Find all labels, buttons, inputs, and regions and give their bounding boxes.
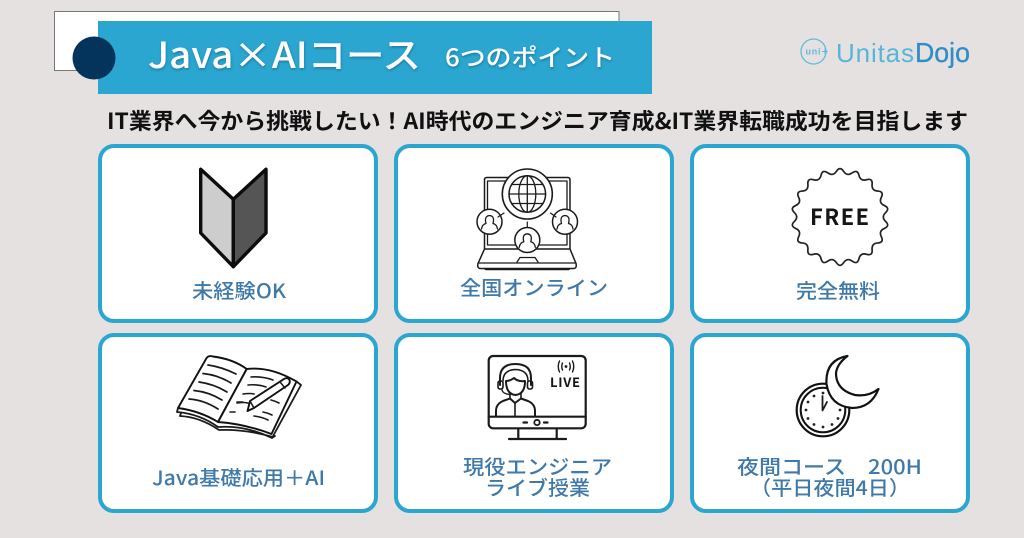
- logo: Unitas Dojo: uni: [806, 46, 820, 56]
- label: 完全無料: [796, 275, 880, 304]
- icon: FREE badge: FREE: [810, 200, 869, 232]
- label: 全国オンライン: [460, 272, 608, 301]
- panel: 完全無料: [692, 146, 968, 321]
- label: line 2: （平日夜間4日）: [750, 472, 910, 501]
- icon: monitor with live instructor: [489, 356, 586, 439]
- icon: beginner mark: [201, 169, 266, 267]
- label: line 1: 現役エンジニア: [463, 451, 612, 480]
- label: line 2: ライブ授業: [485, 472, 590, 501]
- panel: 全国オンライン: [396, 146, 672, 321]
- panel: 現役エンジニアライブ授業: [396, 335, 672, 511]
- title: Java×AIコース: [148, 27, 421, 79]
- subtitle in banner: 6つのポイント: [445, 38, 615, 73]
- lead text: IT業界へ今から挑戦したい！AI時代のエンジニア育成&IT業界転職成功を目指します: [107, 104, 968, 136]
- logo: Unitas Dojo: Dojo: [915, 37, 970, 68]
- icon: monitor with live instructor: LIVE: [550, 372, 580, 391]
- icon: clock and crescent moon: [797, 356, 878, 436]
- label: 未経験OK: [192, 275, 287, 304]
- header banner: [54, 12, 652, 94]
- panel: Java基礎応用＋AI: [100, 335, 376, 511]
- icon: laptop with globe and people: [477, 169, 578, 270]
- panel: 未経験OK: [100, 146, 376, 321]
- label: Java基礎応用＋AI: [152, 462, 325, 491]
- icon: FREE badge: [792, 169, 888, 265]
- logo: Unitas Dojo: [801, 37, 970, 68]
- logo: Unitas Dojo: Unitas: [836, 38, 914, 68]
- panel: 夜間コース: [692, 335, 968, 511]
- icon: open book and pencil: [177, 356, 301, 438]
- label: line 1: 夜間コース 200H: [737, 451, 922, 480]
